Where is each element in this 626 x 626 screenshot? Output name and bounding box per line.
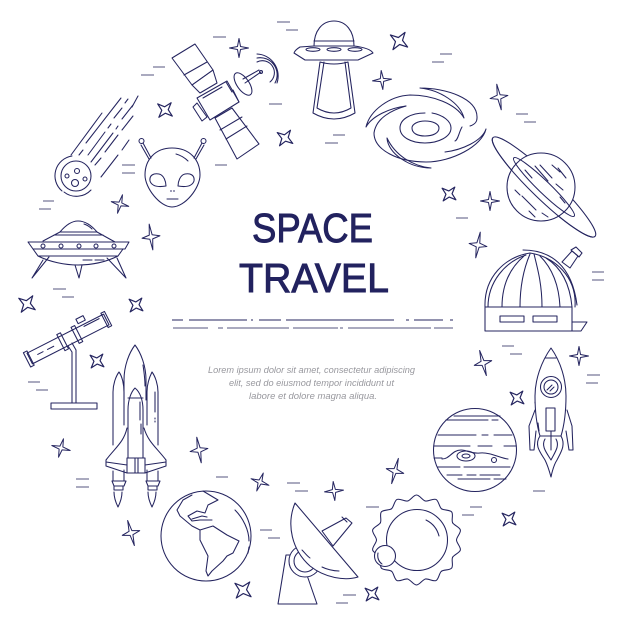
icon: space shuttle — [106, 345, 166, 507]
icon: UFO with beam — [294, 21, 373, 119]
icon: sun with planet — [371, 495, 462, 585]
icon: ringed planet — [485, 129, 603, 245]
icon: Jupiter — [434, 408, 516, 492]
icon: comet — [55, 96, 138, 196]
title — [239, 205, 389, 301]
body text — [208, 365, 416, 402]
title: SPACE — [252, 205, 373, 251]
body text: labore et dolore magna aliqua. — [249, 391, 377, 402]
icon: observatory — [485, 247, 587, 331]
icon: alien head — [139, 138, 206, 207]
icon: earth — [161, 491, 251, 581]
body text: Lorem ipsum dolor sit amet, consectetur adipiscing — [208, 365, 416, 376]
title: TRAVEL — [239, 255, 389, 301]
icon: spiral galaxy — [366, 88, 486, 168]
body text: elit, sed do eiusmod tempor incididunt ut — [229, 378, 394, 389]
icon: telescope — [21, 306, 112, 409]
icon: radio dish — [278, 503, 358, 604]
icon: rocket — [529, 348, 573, 477]
icon: flying saucer — [28, 221, 129, 278]
icon: satellite — [172, 44, 278, 159]
